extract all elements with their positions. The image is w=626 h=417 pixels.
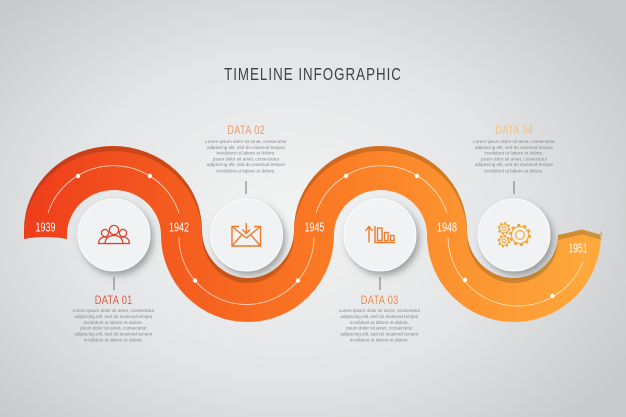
- text block: data 01: [73, 295, 155, 342]
- text block: data 01: DATA 01: [95, 295, 132, 307]
- text block: data 04: incididunt ut labore et dolore.: [484, 150, 544, 156]
- year 1948: 1948: [437, 220, 457, 234]
- text block: data 02: incididunt ut labore et dolore.: [216, 168, 276, 174]
- circle 3 with bar chart icon: [344, 199, 416, 271]
- text block: data 02: Lorem ipsum dolor sit amet, consectetur: [205, 139, 287, 144]
- year 1945: 1945: [304, 220, 324, 234]
- connector 4: [514, 181, 515, 194]
- text block: data 01: Lorem ipsum dolor sit amet, consectetur: [73, 308, 155, 313]
- circle 2 with mail icon: [210, 199, 282, 271]
- text block: data 03: Lorem ipsum dolor sit amet, consectetur: [339, 308, 421, 313]
- text block: data 04: psum dolor sit amet, consectetur: [481, 156, 548, 162]
- circle 4 with gears icon: [478, 199, 550, 271]
- text block: data 04: Lorem ipsum dolor sit amet, consectetur: [473, 139, 555, 144]
- year 1942: 1942: [169, 220, 189, 234]
- icon: people: [98, 225, 130, 244]
- text block: data 01: adipiscing elit, sed do eiusmod tempor: [74, 332, 153, 336]
- thin line: segment 3: [316, 166, 447, 213]
- ribbon body: [24, 151, 602, 322]
- text block: data 04: adipiscing elit, sed do eiusmod tempor: [475, 162, 554, 167]
- connector 1: [114, 277, 115, 290]
- text block: data 02: DATA 02: [227, 125, 265, 137]
- thin line: segment 2: [179, 237, 314, 304]
- text block: data 03: incididunt ut labore et dolore.: [350, 320, 409, 325]
- text block: data 02: incididunt ut labore et dolore.: [216, 150, 276, 156]
- text block: data 01: incididunt ut labore et dolore.: [84, 338, 143, 342]
- circle 1 with people icon: [78, 199, 150, 271]
- text block: data 03: incididunt ut labore et dolore.: [350, 338, 409, 342]
- text block: data 04: [473, 125, 555, 174]
- icon: gears: [498, 223, 530, 246]
- text block: data 04: incididunt ut labore et dolore.: [484, 168, 544, 174]
- text block: data 02: [205, 125, 287, 174]
- ribbon shadow edge: [24, 146, 602, 317]
- year 1951: 1951: [568, 240, 588, 256]
- thin line: segment 1: [48, 166, 179, 213]
- text block: data 02: psum dolor sit amet, consectetur: [213, 156, 280, 162]
- icon: bars and arrow: [366, 226, 395, 242]
- thin line: segment 4: [448, 237, 583, 306]
- text block: data 04: DATA 04: [495, 125, 533, 137]
- text block: data 02: adipiscing elit, sed do eiusmod tempor: [207, 145, 286, 150]
- text block: data 03: DATA 03: [361, 295, 398, 307]
- text block: data 03: psum dolor sit amet, consectetur: [346, 326, 413, 330]
- timeline ribbon: [24, 146, 602, 322]
- text block: data 01: incididunt ut labore et dolore.: [84, 320, 143, 325]
- text block: data 04: adipiscing elit, sed do eiusmod tempor: [475, 145, 554, 150]
- year 1939: 1939: [36, 220, 56, 234]
- text block: data 01: psum dolor sit amet, consectetur: [80, 326, 147, 330]
- text block: data 01: adipiscing elit, sed do eiusmod tempor: [74, 314, 153, 319]
- text block: data 03: adipiscing elit, sed do eiusmod tempor: [340, 314, 419, 319]
- text block: data 03: adipiscing elit, sed do eiusmod tempor: [340, 332, 419, 336]
- icon: envelope with download arrow: [232, 223, 260, 246]
- text block: data 03: [339, 295, 421, 342]
- connector 2: [246, 181, 247, 194]
- title: TIMELINE INFOGRAPHIC: [224, 65, 401, 85]
- text block: data 02: adipiscing elit, sed do eiusmod tempor: [207, 162, 286, 167]
- connector 3: [380, 277, 381, 290]
